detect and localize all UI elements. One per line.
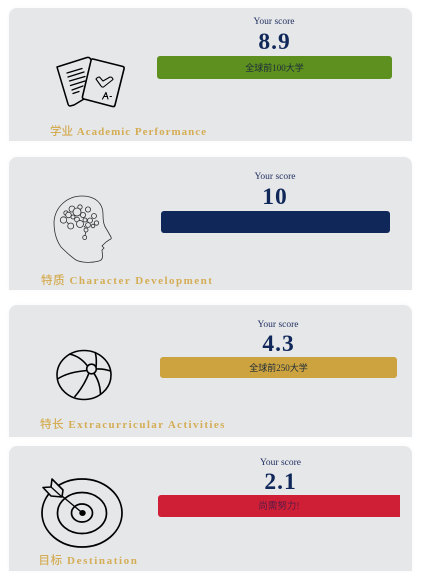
bar: top 250 universities: 全球前250大学 — [249, 363, 308, 373]
bar: top 250 universities — [160, 357, 397, 378]
panel: character development — [9, 157, 412, 290]
icon: graded papers — [56, 56, 125, 108]
panel: extracurricular activities — [9, 305, 412, 437]
heading: character development: 特质 Character Development — [41, 272, 213, 288]
icon: target with arrow — [41, 478, 123, 548]
heading: destination: 目标 Destination — [38, 552, 138, 568]
score 2.1: 2.1 — [264, 469, 297, 495]
panel: academic performance — [9, 8, 412, 141]
your score label 4: Your score — [260, 458, 301, 468]
heading: academic performance: 学业 Academic Performance — [50, 122, 207, 138]
bar: top 100 universities: 全球前100大学 — [245, 63, 304, 73]
your score label 2: Your score — [254, 172, 296, 182]
icon: beach ball — [56, 350, 112, 400]
panel: destination — [9, 446, 412, 571]
bar: needs more effort: 尚需努力! — [258, 502, 300, 512]
heading: extracurricular activities: 特长 Extracurricular Activities — [40, 416, 226, 432]
bar: needs more effort — [158, 495, 400, 516]
score 10: 10 — [262, 184, 288, 210]
your score label 3: Your score — [258, 320, 298, 330]
bar: score 10 — [160, 211, 390, 233]
score 4.3: 4.3 — [262, 330, 295, 356]
bar: top 100 universities — [157, 56, 392, 78]
icon: head with neural network — [54, 196, 112, 263]
your score label 1: Your score — [254, 16, 294, 26]
score 8.9: 8.9 — [258, 28, 291, 54]
